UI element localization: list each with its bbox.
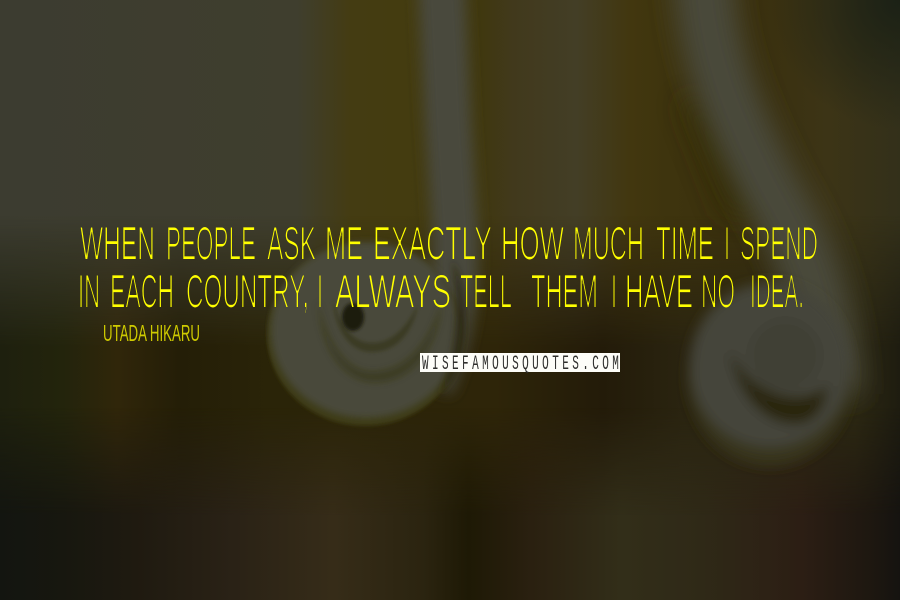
quote line 1: I — [724, 218, 730, 270]
spiral: left — [267, 242, 466, 426]
quote line 2: COUNTRY, — [186, 266, 309, 318]
quote line 2: IN — [78, 266, 100, 318]
author: UTADA HIKARU — [103, 320, 200, 346]
quote line 2: TELL — [460, 266, 512, 318]
strand: right noodle — [698, 0, 832, 395]
quote line 1: ME — [325, 218, 363, 270]
quote line 2 — [78, 266, 804, 318]
logo: wisefamousquotes.com: WISEFAMOUSQUOTES.COM — [422, 353, 619, 375]
quote line 1 — [80, 218, 818, 270]
quote line 2: THEM — [531, 266, 598, 318]
quote text: IDEA. — [750, 266, 804, 318]
quote line 2: EACH — [110, 266, 174, 318]
quote line 1: WHEN — [80, 218, 155, 270]
quote text — [78, 218, 818, 318]
quote line 1: ASK — [267, 218, 316, 270]
quote line 1: MUCH — [573, 218, 644, 270]
quote line 1: HOW — [501, 218, 564, 270]
strand: left noodle — [430, 0, 455, 385]
quote line 1: PEOPLE — [166, 218, 256, 270]
text: SPEND — [740, 218, 818, 270]
quote line 2: ALWAYS — [335, 266, 451, 318]
quote line 2: NO — [701, 266, 735, 318]
spiral: right — [688, 283, 852, 466]
quote line 2: HAVE — [625, 266, 693, 318]
quote line 1: EXACTLY — [373, 218, 492, 270]
quote line 1: TIME — [656, 218, 714, 270]
quote line 2: I — [611, 266, 617, 318]
quote line 2: I — [317, 266, 323, 318]
